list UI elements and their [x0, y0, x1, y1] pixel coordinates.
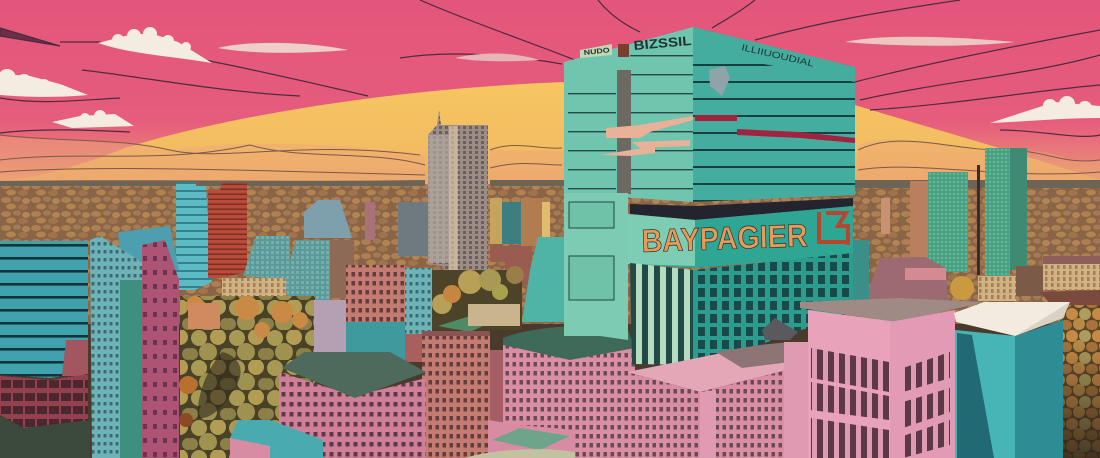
- dark band: [630, 198, 853, 220]
- dark trees: [0, 416, 90, 458]
- sign band: [628, 206, 853, 268]
- rooftop machinery: [716, 318, 798, 368]
- tower group right: [490, 198, 550, 246]
- left upper face: [564, 27, 693, 202]
- glass tower A: [243, 236, 290, 280]
- hazy hill band: [0, 136, 1100, 182]
- dark shadow gap: [198, 352, 241, 418]
- top sign right: ILLIIUOUDIAL: [741, 42, 815, 69]
- graffiti bird: [709, 66, 730, 96]
- white roof: [954, 302, 1070, 336]
- pink ornate building: [279, 352, 426, 458]
- mast: [977, 165, 980, 275]
- green tower middle: [928, 172, 968, 272]
- yellow dome horizon: [0, 82, 1100, 186]
- small tan tower: [881, 198, 890, 234]
- low beige block far right: [1043, 256, 1100, 290]
- distant hills lines: [0, 135, 1100, 175]
- brown wing: [328, 240, 354, 298]
- tan tower: [910, 181, 928, 257]
- teal corner building: [954, 302, 1070, 458]
- clouds: [0, 27, 1100, 128]
- peach streaks: [600, 116, 693, 156]
- left face ledges: [630, 38, 693, 199]
- lower red wing: [0, 340, 88, 428]
- grid window front: [693, 253, 853, 368]
- teal stepped slab: [522, 237, 565, 322]
- large pink building: [784, 298, 985, 458]
- glass tower B: [284, 240, 330, 310]
- top sign left: NUDO: [583, 47, 611, 57]
- glass tower back: [304, 200, 352, 238]
- teal side block: [405, 268, 432, 334]
- red tower: [208, 183, 247, 278]
- blue-pink block: [314, 300, 348, 352]
- teal roof small building: [230, 420, 323, 458]
- lower plaza building: [465, 420, 575, 458]
- central tall tower: [428, 110, 488, 276]
- ground base: [0, 180, 1100, 458]
- round roof building: [868, 257, 974, 305]
- sign text: BAYPAGIER: [641, 217, 808, 259]
- beige low: [222, 278, 286, 302]
- red streaks: [695, 115, 855, 143]
- brick mid building: [422, 331, 504, 458]
- lower left column: [564, 193, 628, 340]
- right upper face: [693, 27, 855, 202]
- tall teal and pink tower: [90, 226, 179, 458]
- brick and teal cluster: [314, 265, 432, 364]
- low beige block: [978, 266, 1043, 301]
- teal stepped tower: [176, 182, 212, 290]
- brown block: [490, 246, 532, 285]
- brown roof far right: [1040, 290, 1100, 318]
- mid-ground forest: [179, 237, 565, 458]
- top sign left: [580, 33, 692, 58]
- left striped building: [0, 241, 90, 458]
- main building: [564, 27, 869, 368]
- teal lower glass: [346, 322, 406, 364]
- slim towers: [365, 202, 428, 256]
- window column: [617, 70, 631, 194]
- orange block: [188, 303, 220, 329]
- beige small block: [468, 304, 520, 326]
- far forest: [0, 184, 1100, 324]
- sky background: [0, 0, 1100, 186]
- right wall: [890, 310, 955, 458]
- left distant towers: [176, 182, 550, 310]
- window bars: [811, 348, 950, 458]
- top sign left: BIZSSIL: [633, 33, 692, 53]
- distant right towers: [881, 148, 1100, 318]
- left wall: [808, 310, 897, 458]
- pink green-roof building: [503, 326, 635, 458]
- striped glass front: [630, 263, 693, 365]
- brick block: [346, 265, 405, 322]
- right foreground forest: [1060, 305, 1100, 458]
- sign logo: [819, 212, 848, 245]
- brown-brick low: [405, 334, 423, 362]
- green tower tall: [985, 148, 1027, 276]
- green roof: [282, 352, 426, 398]
- roof: [800, 298, 985, 322]
- horizon strip: [0, 180, 1100, 188]
- sky crack lines: [0, 0, 1100, 136]
- lower pink building: [627, 318, 803, 458]
- right cluster trees: [432, 266, 524, 332]
